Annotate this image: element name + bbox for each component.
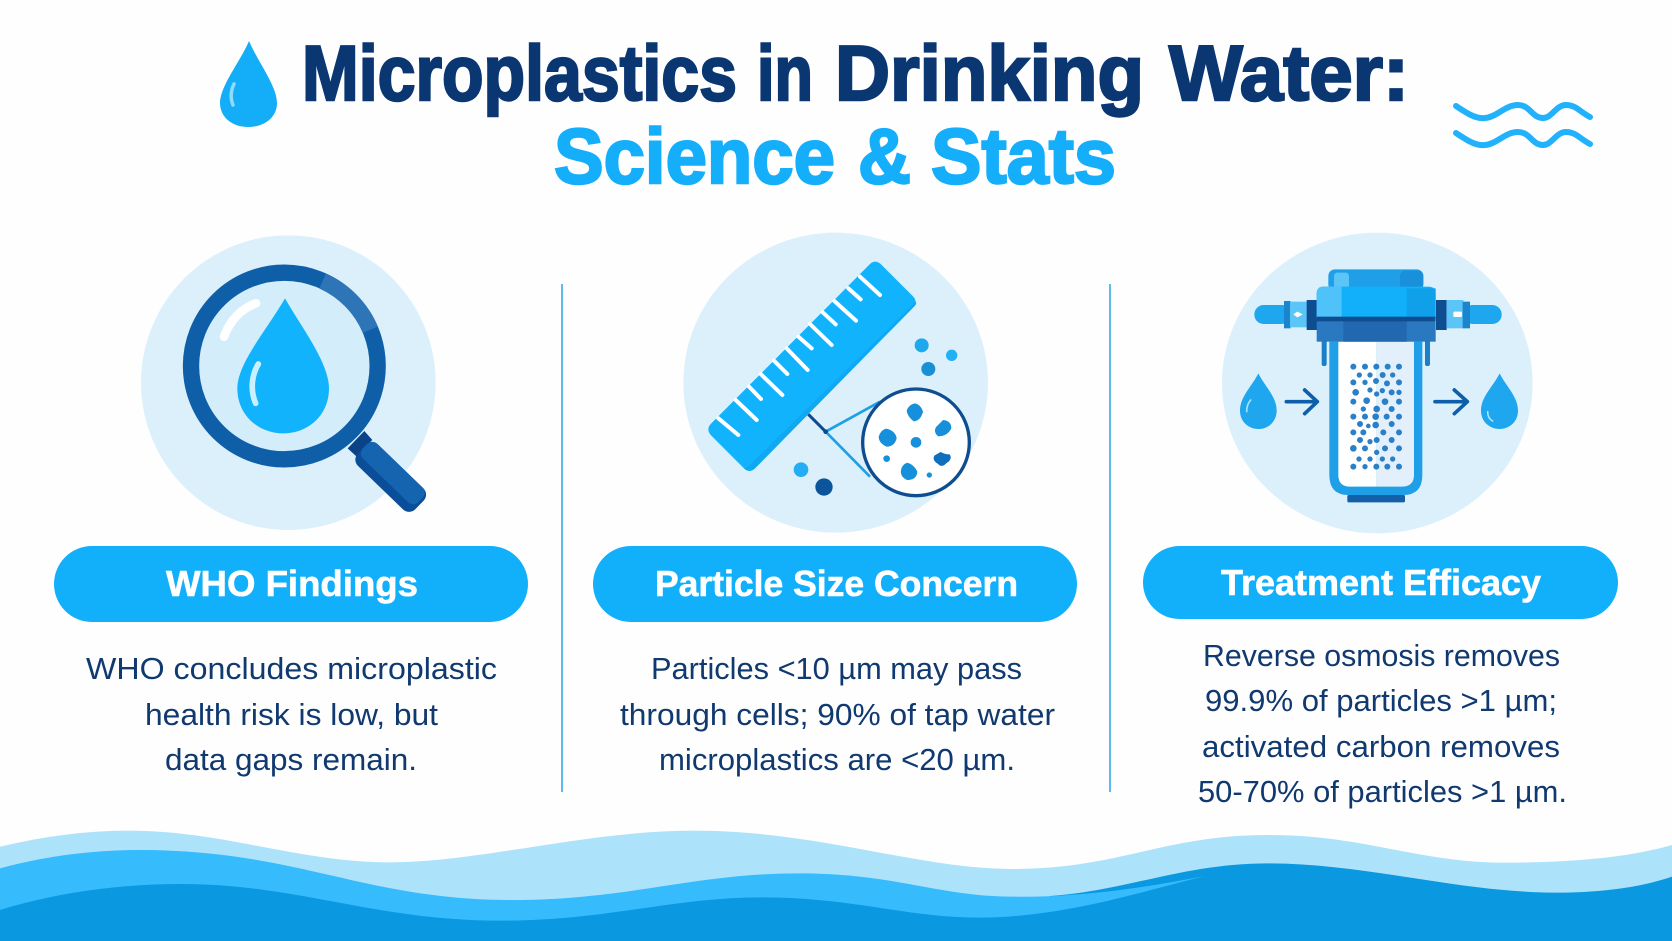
text: particle size description: [620, 651, 1055, 777]
icon: decorative waves: [1456, 105, 1590, 145]
panel: WHO findings: [54, 235, 528, 777]
title line 1: Drinking: [835, 29, 1144, 117]
icon: magnifying glass over water drop: [141, 235, 436, 530]
title line 2: &: [858, 112, 911, 200]
text: treatment efficacy description: Reverse osmosis removes: [1203, 638, 1560, 673]
title line 1: Water:: [1169, 29, 1409, 117]
icon: ruler with magnified particles: [683, 233, 988, 533]
heading pill: Treatment Efficacy: Treatment Efficacy: [1221, 562, 1541, 603]
footer water waves: [0, 831, 1672, 941]
divider right: [1109, 284, 1111, 792]
title line 2: [554, 112, 1116, 200]
icon: water filter with drops and arrows: [1222, 233, 1533, 533]
title line 1: [302, 29, 1409, 117]
text: particle size description: Particles <10 µm may pass: [651, 651, 1022, 686]
heading pill: WHO Findings: WHO Findings: [166, 563, 418, 604]
title line 1: in: [757, 29, 813, 117]
text: treatment efficacy description: 50-70% of particles >1 µm.: [1198, 774, 1567, 809]
text: treatment efficacy description: [1198, 638, 1567, 809]
text: WHO findings description: health risk is low, but: [145, 697, 438, 732]
heading pill: WHO Findings: [54, 546, 528, 622]
panel: particle size concern: [593, 233, 1077, 777]
text: WHO findings description: data gaps remain.: [165, 742, 417, 777]
header: [220, 29, 1590, 200]
title line 1: Microplastics: [302, 29, 737, 117]
icon: title water drop: [220, 41, 277, 127]
text: treatment efficacy description: activated carbon removes: [1202, 729, 1560, 764]
text: treatment efficacy description: 99.9% of particles >1 µm;: [1205, 683, 1557, 718]
title line 2: Science: [554, 112, 835, 200]
text: WHO findings description: [86, 651, 497, 777]
divider left: [561, 284, 563, 792]
heading pill: Particle Size Concern: [593, 546, 1077, 622]
title line 2: Stats: [931, 112, 1116, 200]
panel: treatment efficacy: [1143, 233, 1618, 809]
heading pill: Particle Size Concern: Particle Size Concern: [655, 563, 1018, 604]
text: WHO findings description: WHO concludes microplastic: [86, 651, 497, 686]
heading pill: Treatment Efficacy: [1143, 546, 1618, 619]
text: particle size description: microplastics are <20 µm.: [659, 742, 1015, 777]
text: particle size description: through cells; 90% of tap water: [620, 697, 1055, 732]
